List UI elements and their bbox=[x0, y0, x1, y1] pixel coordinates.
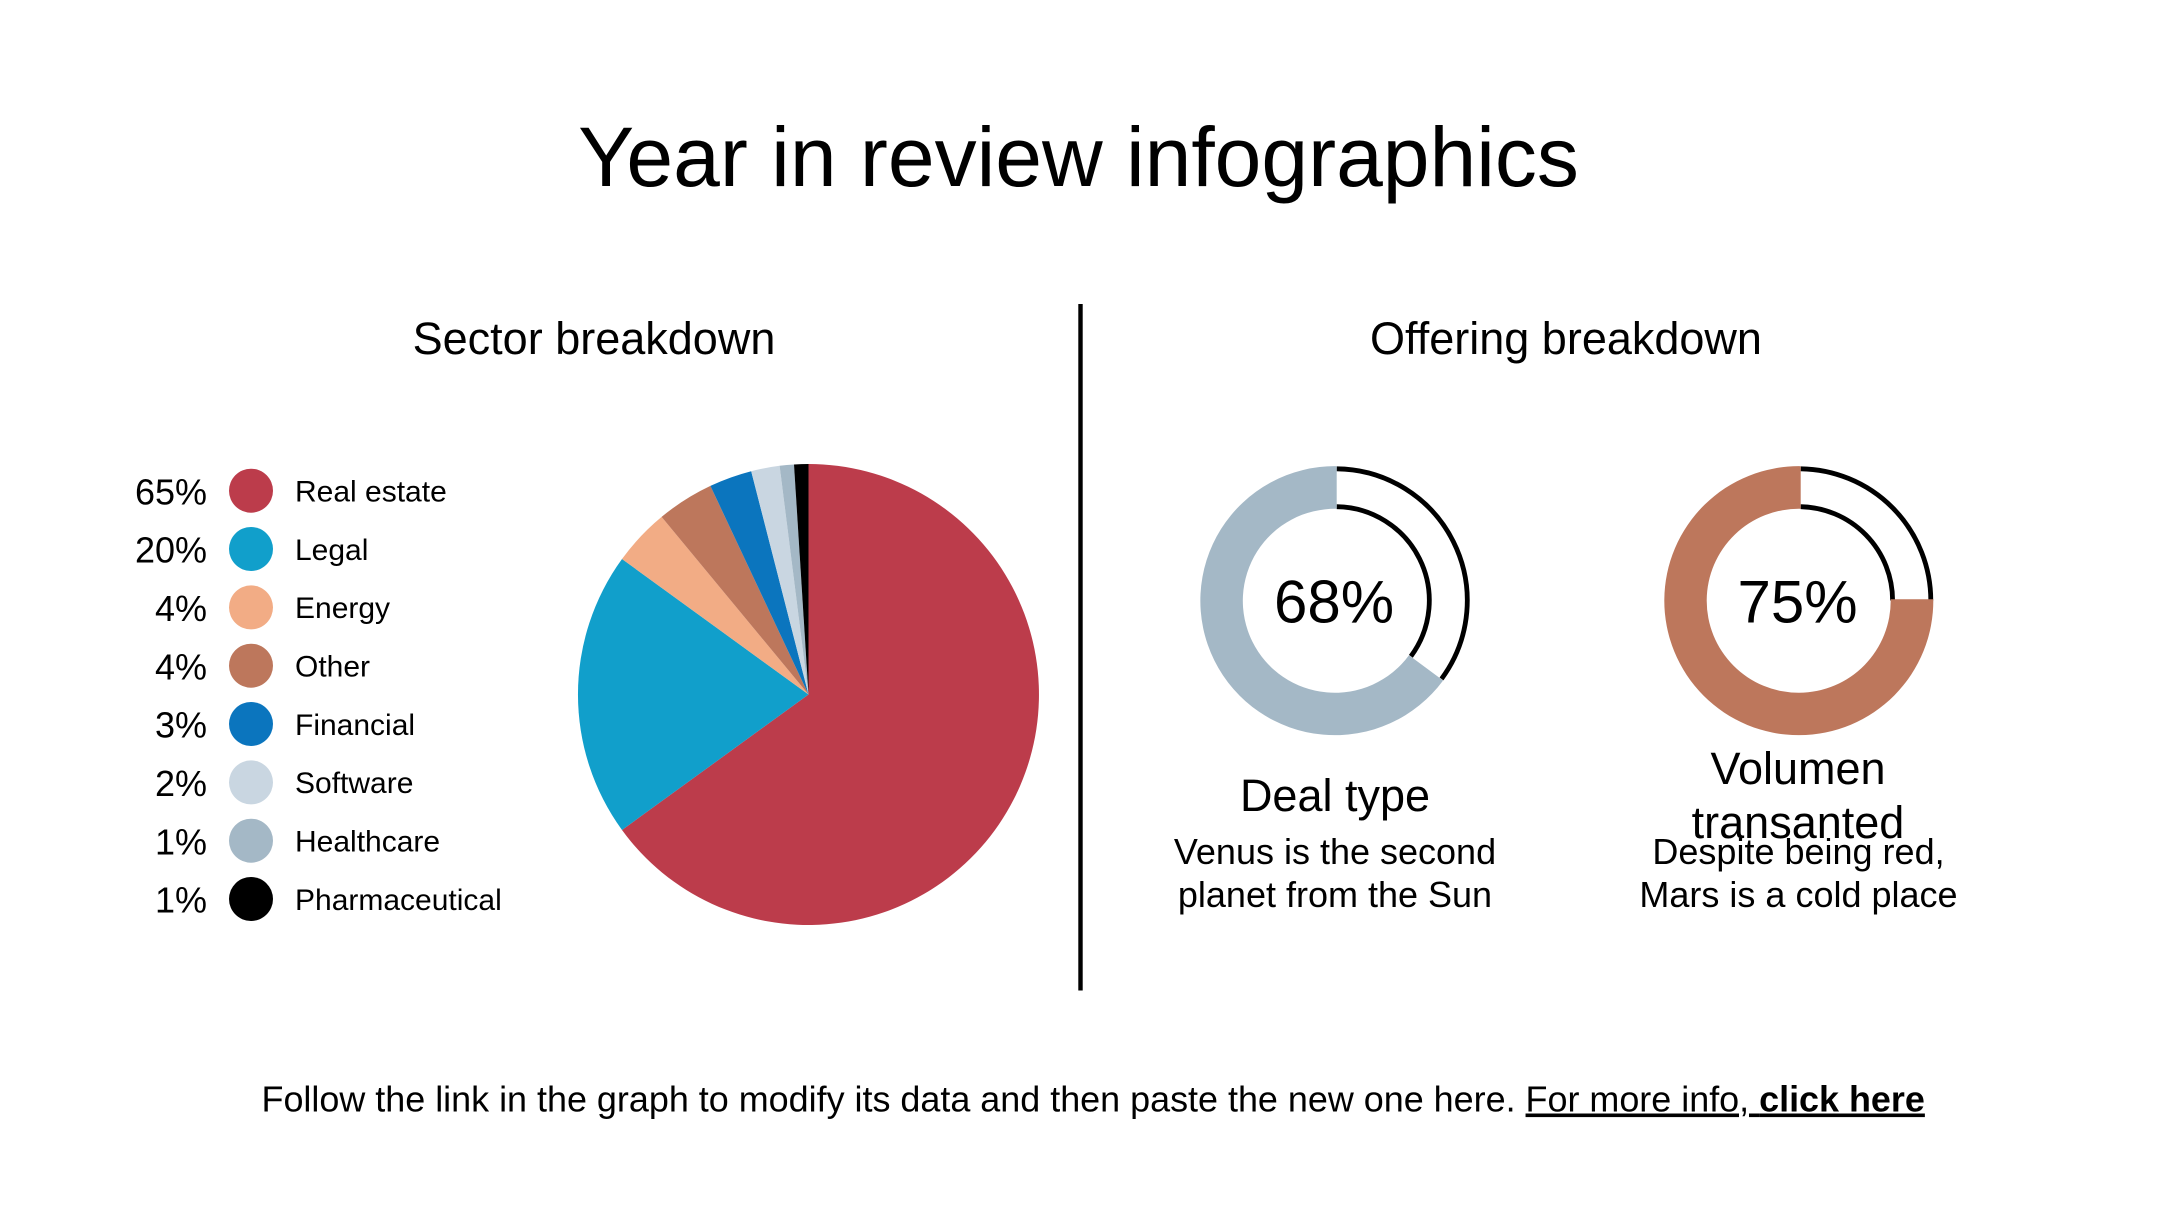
donut chart: volume transacted 75%: 75% bbox=[1737, 569, 1858, 636]
legend row: financial: 3% bbox=[155, 705, 207, 746]
text block: volumen transanted: Despite being red, bbox=[1652, 831, 1945, 872]
legend row: energy: Energy bbox=[295, 592, 390, 625]
text block: volumen transanted: transanted bbox=[1692, 797, 1904, 848]
legend row: pharmaceutical bbox=[155, 877, 502, 921]
panel: sector breakdown bbox=[135, 313, 1039, 925]
legend row: real estate bbox=[135, 469, 447, 513]
footer note: Follow the link in the graph to modify its data and then paste the new one here. For more info, click here bbox=[262, 1078, 1925, 1120]
legend row: healthcare: Healthcare bbox=[295, 826, 440, 858]
title: Year in review infographics bbox=[578, 110, 1579, 204]
legend row: healthcare bbox=[155, 819, 440, 863]
legend row: other: Other bbox=[295, 650, 370, 684]
legend row: software: Software bbox=[295, 767, 413, 800]
legend row: energy bbox=[155, 585, 390, 629]
text block: deal type: planet from the Sun bbox=[1178, 874, 1492, 915]
text block: volumen transanted: Mars is a cold place bbox=[1639, 874, 1958, 915]
donut chart: deal type 68%: 68% bbox=[1274, 569, 1394, 636]
panel: offering breakdown bbox=[1174, 313, 1958, 915]
vertical divider bbox=[1078, 304, 1083, 990]
donut chart: volume transacted 75% bbox=[1664, 466, 1933, 735]
text block: deal type: Deal type bbox=[1240, 770, 1430, 821]
legend row: pharmaceutical: 1% bbox=[155, 880, 207, 921]
text block: volumen transanted: Volumen bbox=[1710, 743, 1886, 794]
pie chart: sector shares bbox=[578, 464, 1039, 925]
legend row: software: 2% bbox=[155, 763, 207, 804]
legend row: other bbox=[155, 644, 370, 688]
heading: offering breakdown: Offering breakdown bbox=[1370, 313, 1762, 364]
donut chart: deal type 68% bbox=[1200, 466, 1467, 735]
heading: sector breakdown: Sector breakdown bbox=[413, 313, 775, 364]
text block: deal type: Venus is the second bbox=[1174, 831, 1496, 872]
legend row: legal bbox=[135, 527, 368, 571]
legend row: financial: Financial bbox=[295, 709, 415, 742]
legend row: pharmaceutical: Pharmaceutical bbox=[295, 884, 502, 917]
legend row: healthcare: 1% bbox=[155, 821, 207, 862]
legend row: software bbox=[155, 760, 413, 804]
legend row: other: 4% bbox=[155, 646, 207, 687]
legend row: legal: Legal bbox=[295, 534, 368, 567]
text block: deal type bbox=[1174, 770, 1496, 915]
legend row: energy: 4% bbox=[155, 588, 207, 629]
legend: sectors bbox=[135, 469, 502, 921]
legend row: financial bbox=[155, 702, 415, 746]
text block: volumen transanted bbox=[1639, 743, 1958, 915]
legend row: real estate: 65% bbox=[135, 471, 207, 512]
legend row: legal: 20% bbox=[135, 530, 207, 571]
legend row: real estate: Real estate bbox=[295, 476, 447, 508]
